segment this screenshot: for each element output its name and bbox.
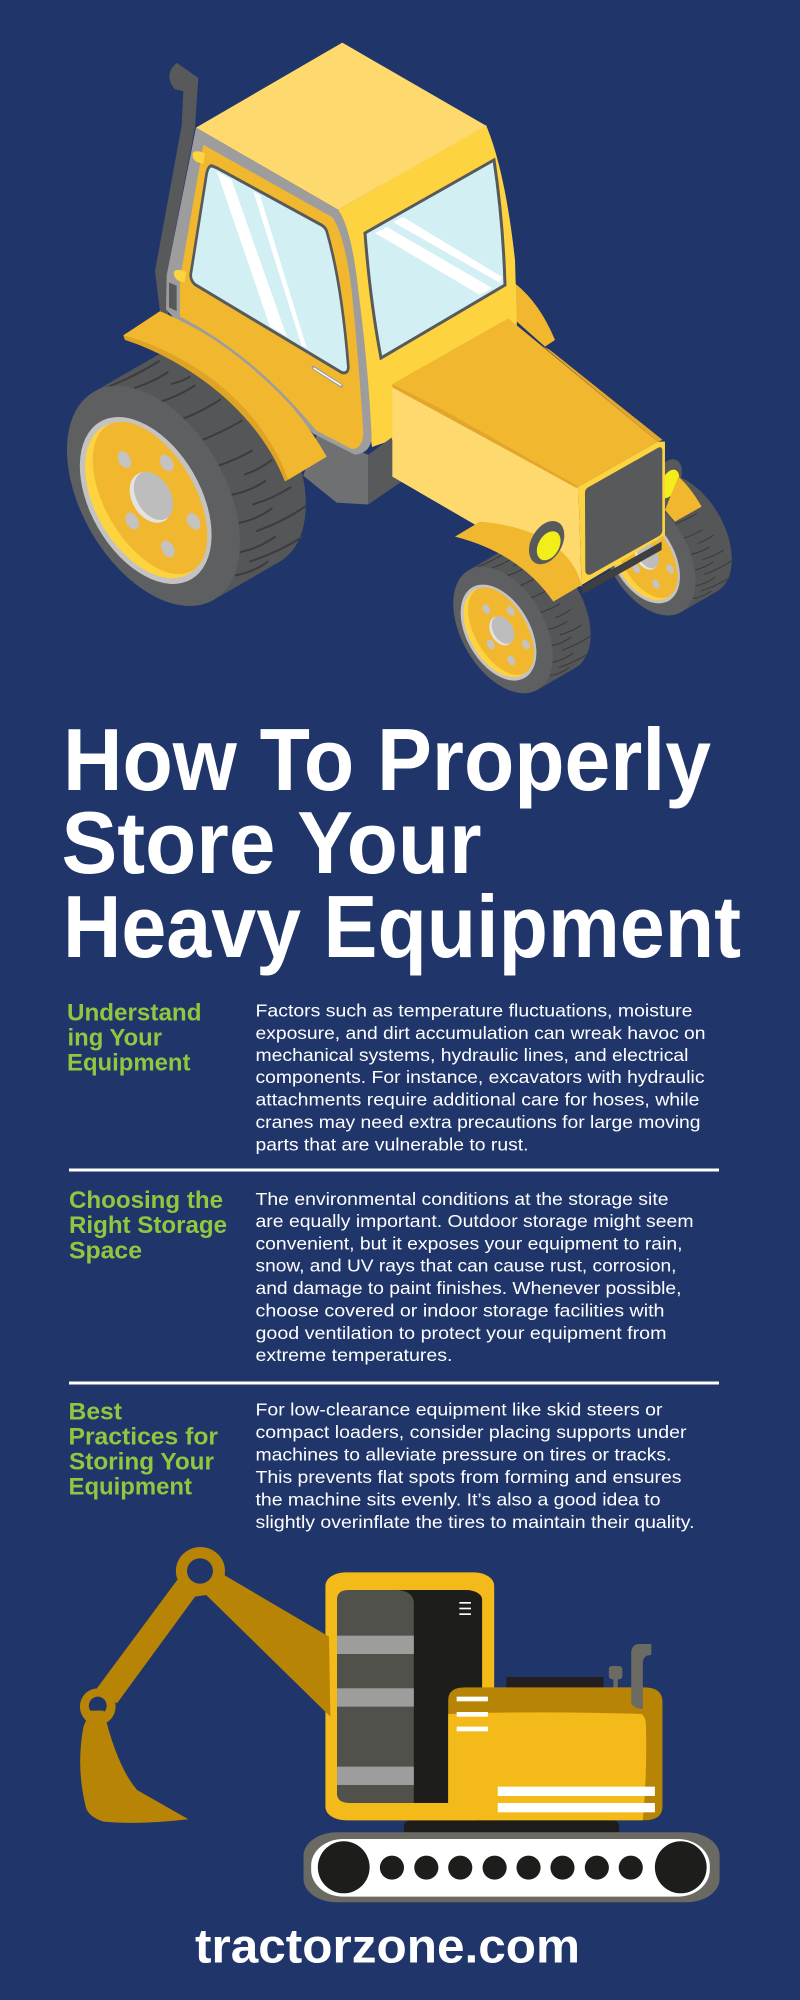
- door window: [191, 166, 348, 373]
- body text: snow, and UV rays that can cause rust, corrosion,: [256, 1256, 676, 1276]
- cab roof: [196, 43, 486, 210]
- heading: [68, 1398, 218, 1500]
- body text: [256, 1000, 706, 1154]
- cab seat panel: [337, 1590, 414, 1803]
- body text: Factors such as temperature fluctuations, moisture: [256, 1000, 692, 1020]
- seat stripes: [337, 1636, 414, 1785]
- cab window: [337, 1590, 482, 1803]
- body text: mechanical systems, hydraulic lines, and electrical: [256, 1045, 688, 1065]
- under strip: [582, 542, 662, 594]
- track wheels: [318, 1841, 707, 1893]
- illustration: yellow tractor: [31, 43, 751, 710]
- heading: Space: [69, 1237, 142, 1264]
- section: understanding your equipment: [67, 1000, 706, 1154]
- heading: Understand: [67, 1000, 202, 1027]
- body text: machines to alleviate pressure on tires or tracks.: [256, 1444, 672, 1464]
- section: choosing the right storage space: [69, 1187, 694, 1365]
- heading: Practices for: [68, 1423, 218, 1450]
- heading: Right Storage: [69, 1212, 227, 1239]
- title: Store Your: [62, 793, 482, 892]
- knob: [609, 1666, 622, 1688]
- white marks: [457, 1697, 655, 1812]
- body text: attachments require additional care for hoses, while: [256, 1090, 700, 1110]
- heading: Choosing the: [69, 1187, 223, 1214]
- body text: components. For instance, excavators with hydraulic: [256, 1067, 705, 1087]
- cab frame: [325, 1572, 494, 1820]
- body text: For low-clearance equipment like skid steers or: [256, 1400, 663, 1420]
- body text: are equally important. Outdoor storage might seem: [256, 1211, 694, 1231]
- title: Heavy Equipment: [63, 877, 741, 976]
- far headlight and fender: [647, 455, 702, 522]
- front frame: [578, 442, 665, 585]
- undercarriage: [404, 1820, 619, 1832]
- window reflections: [217, 171, 307, 348]
- body text: slightly overinflate the tires to maintain their quality.: [256, 1512, 694, 1532]
- body text: convenient, but it exposes your equipment to rain,: [256, 1234, 682, 1254]
- body text: extreme temperatures.: [256, 1345, 452, 1365]
- section: best practices for storing your equipment: [68, 1398, 694, 1532]
- cab right face: [338, 125, 517, 447]
- rear fender: [123, 311, 327, 482]
- body text: parts that are vulnerable to rust.: [256, 1134, 528, 1154]
- near headlight: [522, 515, 572, 571]
- body text: the machine sits evenly. It’s also a good idea to: [256, 1490, 660, 1510]
- body text: good ventilation to protect your equipment from: [256, 1323, 666, 1343]
- heading: Equipment: [68, 1473, 192, 1500]
- engine body: [345, 1687, 662, 1820]
- hood top: [392, 318, 658, 487]
- title: How To Properly: [63, 710, 711, 809]
- body text: The environmental conditions at the storage site: [256, 1189, 668, 1209]
- exhaust stack and cab lower block: [155, 63, 402, 504]
- hood and front: [392, 318, 665, 602]
- body text: [256, 1189, 694, 1365]
- rear right fender: [515, 283, 555, 347]
- near front wheel: [433, 528, 611, 710]
- heading: [67, 1000, 202, 1077]
- front fender: [455, 522, 582, 602]
- door hinges: [174, 151, 205, 283]
- door handle: [313, 367, 341, 386]
- fender edge trim: [179, 318, 315, 431]
- body text: [256, 1400, 694, 1532]
- heading: [69, 1187, 227, 1264]
- cab front window: [365, 160, 505, 358]
- grille: [585, 447, 662, 575]
- hood edges: [392, 347, 663, 488]
- heading: Best: [68, 1398, 122, 1425]
- body text: and damage to paint finishes. Whenever possible,: [256, 1278, 682, 1298]
- footer website: tractorzone.com: [195, 1921, 580, 1974]
- engine roof block: [506, 1677, 604, 1688]
- crawler track: [304, 1832, 720, 1902]
- arm pivot holes: [89, 1558, 213, 1715]
- far front wheel: [581, 457, 751, 632]
- heading: Equipment: [67, 1050, 191, 1077]
- title: [62, 710, 741, 976]
- excavator arm: [80, 1547, 330, 1725]
- menu marks: [459, 1602, 471, 1615]
- body text: cranes may need extra precautions for large moving: [256, 1112, 700, 1132]
- exhaust: [631, 1644, 651, 1709]
- body text: exposure, and dirt accumulation can wreak havoc on: [256, 1023, 706, 1043]
- body text: choose covered or indoor storage facilities with: [256, 1300, 664, 1320]
- body text: compact loaders, consider placing supports under: [256, 1422, 687, 1442]
- body text: This prevents flat spots from forming and ensures: [256, 1467, 682, 1487]
- heading: ing Your: [68, 1025, 162, 1052]
- hood side: [392, 384, 582, 587]
- cab door: [166, 128, 372, 455]
- heading: Storing Your: [69, 1448, 214, 1475]
- side vent: [169, 283, 177, 311]
- bucket: [80, 1711, 188, 1823]
- illustration: excavator: [80, 1547, 720, 1902]
- rear wheel: [31, 318, 342, 636]
